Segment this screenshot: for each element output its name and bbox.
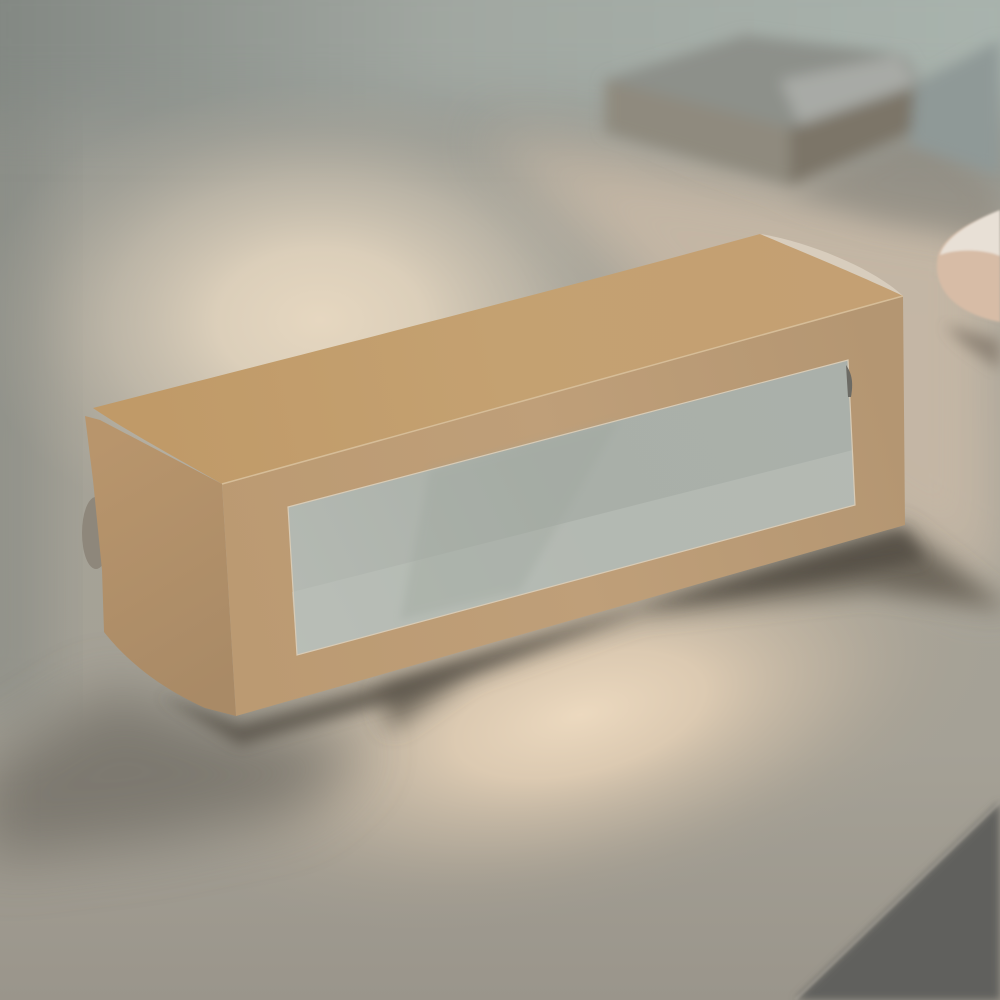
- shadow of background box: [610, 130, 1000, 240]
- background: left falloff: [0, 0, 50, 720]
- blurred background box: [605, 35, 1000, 240]
- table edge highlight: [795, 802, 1000, 1000]
- background slate object: [910, 40, 1000, 175]
- box shadow on table: [0, 690, 370, 860]
- left end face: [85, 416, 236, 716]
- background box top: [605, 35, 920, 130]
- dark notch at right of window: [846, 365, 852, 397]
- background box top highlight: [780, 55, 915, 125]
- light glow on floor: [0, 400, 1000, 1000]
- background: rear wall: [0, 0, 1000, 110]
- box left end: [82, 416, 236, 716]
- pale flap at rear corner: [760, 234, 903, 296]
- top face: [93, 234, 903, 484]
- long shadow behind box: [380, 525, 1000, 730]
- object body: [937, 210, 1000, 322]
- front top crease: [222, 296, 903, 484]
- window inner lower panel: [292, 450, 855, 655]
- blurred pale object at right: [937, 210, 1000, 370]
- object shadow: [945, 325, 1000, 370]
- dark table corner: [795, 802, 1000, 1000]
- front face: [222, 296, 905, 716]
- window frame edge: [288, 360, 855, 655]
- object top: [940, 210, 1000, 256]
- window reflection: [400, 420, 620, 620]
- contact shadow under box: [160, 530, 925, 745]
- background box side: [790, 85, 920, 185]
- background box front: [605, 80, 790, 185]
- kraft box: [82, 234, 905, 716]
- warm table tone on right: [480, 130, 1000, 600]
- window: [288, 360, 855, 655]
- round tab: [82, 497, 110, 569]
- window glass: [288, 360, 855, 655]
- light glow behind box: [0, 0, 1000, 700]
